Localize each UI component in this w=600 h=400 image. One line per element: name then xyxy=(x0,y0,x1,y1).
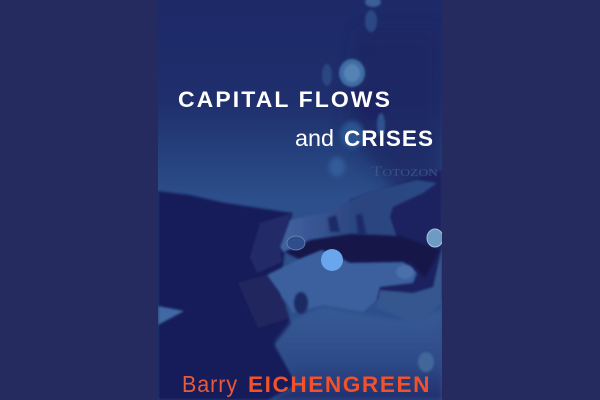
cover photograph xyxy=(158,0,443,400)
coin under thumb xyxy=(294,292,308,314)
book cover infographic xyxy=(158,0,442,400)
edge coin xyxy=(427,229,443,247)
faint coin lower right xyxy=(418,352,434,372)
sleeve cuff xyxy=(250,213,292,273)
title xyxy=(178,87,434,151)
right hand xyxy=(378,250,442,316)
author surname: EICHENGREEN xyxy=(248,372,431,397)
dark sleeve xyxy=(158,191,297,400)
coin on hand xyxy=(287,236,305,250)
lower backdrop xyxy=(270,307,442,400)
coin pile xyxy=(285,234,440,278)
watermark: Totozon xyxy=(371,164,438,180)
bright coin xyxy=(321,249,343,271)
author first name: Barry xyxy=(182,371,238,397)
title line two: and xyxy=(295,125,334,151)
title line one: CAPITAL FLOWS xyxy=(178,87,392,112)
dark shadow behind coins xyxy=(350,78,442,186)
title emphasis: CRISES xyxy=(344,126,434,151)
thumb nail xyxy=(396,265,414,279)
dark area right of hands xyxy=(340,170,442,300)
falling coins xyxy=(322,0,386,177)
lower cuff xyxy=(238,275,289,328)
upper hand xyxy=(280,180,437,252)
author xyxy=(182,371,431,397)
cover backdrop xyxy=(158,0,442,400)
lower hand xyxy=(267,250,417,313)
light wedge bottom left xyxy=(158,306,184,325)
upper hand finger shadows xyxy=(328,214,366,234)
